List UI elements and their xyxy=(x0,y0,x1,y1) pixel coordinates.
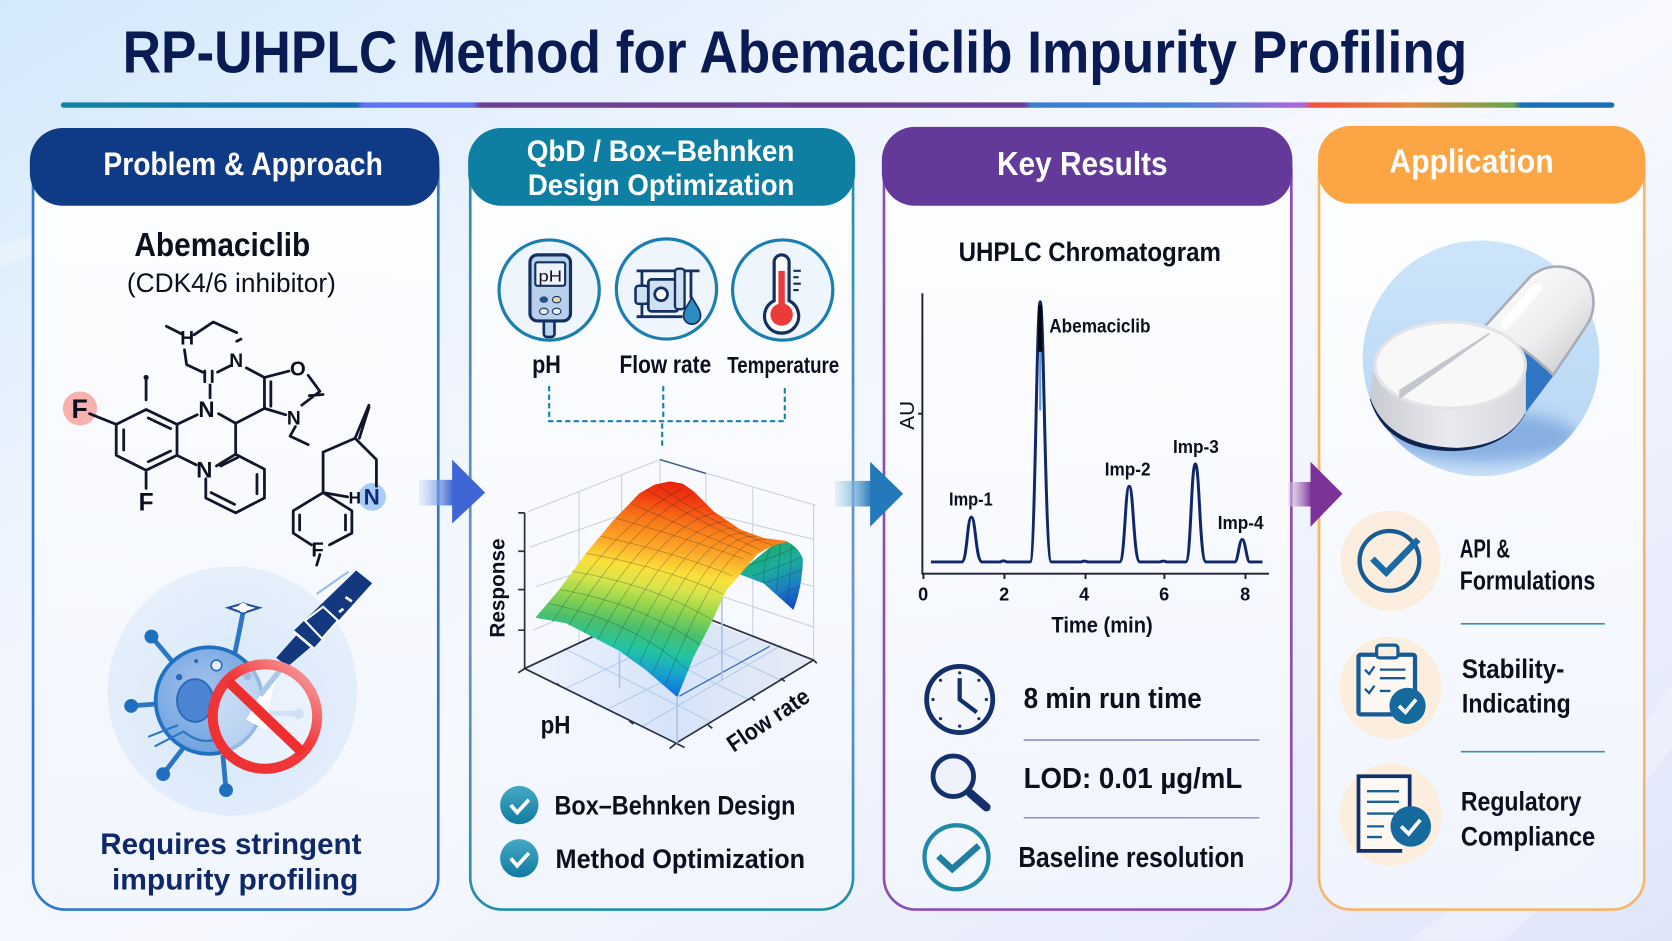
pen body xyxy=(293,570,372,648)
axis tick labels xyxy=(918,584,1250,604)
title divider xyxy=(61,102,1614,108)
drug name: Abemaciclib xyxy=(134,227,310,264)
label: pH: pH xyxy=(532,352,561,379)
panel card xyxy=(33,139,438,910)
chart title: UHPLC Chromatogram xyxy=(959,237,1221,267)
panel card xyxy=(884,139,1291,910)
y axis title: AU xyxy=(897,401,919,430)
axis tick labels: 6 xyxy=(1159,584,1169,604)
panel header xyxy=(1318,126,1645,204)
axis tick labels: 0 xyxy=(918,584,928,604)
header line 2: Design Optimization xyxy=(528,169,794,202)
peak label: Imp-1: Imp-1 xyxy=(949,489,993,509)
bullet: Box-Behnken Design xyxy=(500,786,795,824)
molecular structure: F xyxy=(311,540,324,562)
plot axes xyxy=(518,513,817,749)
bullet: Method Optimization: Method Optimization xyxy=(556,844,805,874)
header line 1: QbD / Box–Behnken xyxy=(527,135,794,168)
molecular structure: N xyxy=(364,484,380,509)
molecular structure: F xyxy=(71,394,88,424)
panel header xyxy=(468,128,855,206)
illustration: cell with prohibited sign xyxy=(108,566,372,816)
molecular structure: N xyxy=(198,397,215,422)
label: stability indicating xyxy=(1462,654,1571,718)
callout text: Requires stringent xyxy=(100,828,362,861)
peak label: Imp-2: Imp-2 xyxy=(1105,460,1151,480)
panel card xyxy=(470,139,853,910)
label: stability indicating: Stability- xyxy=(1462,654,1564,684)
pen neck xyxy=(276,628,317,666)
label: API and formulations: Formulations xyxy=(1460,568,1595,596)
label: API and formulations: API & xyxy=(1460,536,1510,564)
illustration: tablet and capsule xyxy=(1363,240,1599,476)
axis tick labels: 8 xyxy=(1240,584,1250,604)
peak label: Abemaciclib: Abemaciclib xyxy=(1049,317,1151,338)
icon: check badge xyxy=(1340,511,1441,611)
axis label: response: Response xyxy=(485,538,509,638)
label: regulatory compliance: Compliance xyxy=(1461,822,1595,852)
arrow: design to results xyxy=(835,462,903,527)
no sign interior xyxy=(213,664,317,769)
molecular structure xyxy=(63,322,386,565)
label: temperature: Temperature xyxy=(727,352,839,378)
icon: clipboard xyxy=(1339,637,1442,739)
x axis title: Time (min) xyxy=(1051,612,1153,637)
axis label: pH: pH xyxy=(541,713,570,740)
icon: document xyxy=(1339,763,1442,866)
icon: flow pump xyxy=(616,239,717,339)
chromatogram chart xyxy=(918,293,1269,579)
peak label: Imp-4: Imp-4 xyxy=(1218,513,1264,533)
panel: QbD optimization xyxy=(468,128,855,910)
surface underside xyxy=(738,542,803,610)
panel: application xyxy=(1318,126,1645,910)
icon: magnifier xyxy=(933,756,986,807)
arrow: problem to design xyxy=(419,460,485,524)
panel: key results xyxy=(882,127,1292,910)
molecular structure: O xyxy=(290,358,306,380)
axis tick labels: 2 xyxy=(999,584,1009,604)
panel card xyxy=(1319,139,1644,910)
icon: clock xyxy=(927,666,993,733)
molecular structure: H xyxy=(349,488,361,507)
title: RP-UHPLC Method for Abemaciclib Impurity Profiling xyxy=(123,19,1467,86)
label: stability indicating: Indicating xyxy=(1462,688,1571,718)
bullet: Method Optimization xyxy=(500,839,805,878)
icon: pH meter: pH xyxy=(538,269,562,286)
axis tick labels: 4 xyxy=(1079,584,1089,604)
peak label: Imp-3: Imp-3 xyxy=(1173,437,1219,457)
molecular structure: H xyxy=(180,328,194,349)
arrow: results to application xyxy=(1288,462,1343,527)
panel header xyxy=(882,127,1292,206)
molecular structure: N xyxy=(229,351,243,372)
panel header xyxy=(30,128,439,206)
label: regulatory compliance: Regulatory xyxy=(1461,786,1582,816)
label: flow rate: Flow rate xyxy=(620,352,711,379)
molecular structure: N xyxy=(287,408,301,429)
label: API and formulations xyxy=(1460,536,1595,596)
panel: problem and approach xyxy=(30,128,439,910)
no sign ring xyxy=(213,664,317,769)
label: regulatory compliance xyxy=(1461,786,1595,852)
metric: baseline resolution: Baseline resolution xyxy=(1018,842,1244,874)
icon: check circle xyxy=(925,825,988,889)
header text: Application xyxy=(1389,144,1554,181)
response surface plot xyxy=(518,460,817,749)
metric: run time: 8 min run time xyxy=(1024,683,1202,715)
surface top xyxy=(536,482,787,696)
icon: thermometer xyxy=(733,240,833,340)
molecular structure: F xyxy=(139,490,154,517)
bullet: Box-Behnken Design: Box–Behnken Design xyxy=(554,791,795,821)
plot walls and floor xyxy=(525,605,814,743)
header text: Problem & Approach xyxy=(103,146,383,182)
header text: Key Results xyxy=(997,146,1168,183)
axis label: flow rate: Flow rate xyxy=(722,683,814,757)
metric: LOD: LOD: 0.01 µg/mL xyxy=(1024,763,1242,795)
molecular structure: N xyxy=(196,458,212,483)
icon: pH meter xyxy=(499,240,599,340)
callout text line 2: impurity profiling xyxy=(112,863,358,896)
dashed connector xyxy=(549,386,785,446)
drug class: (CDK4/6 inhibitor) xyxy=(127,268,336,298)
